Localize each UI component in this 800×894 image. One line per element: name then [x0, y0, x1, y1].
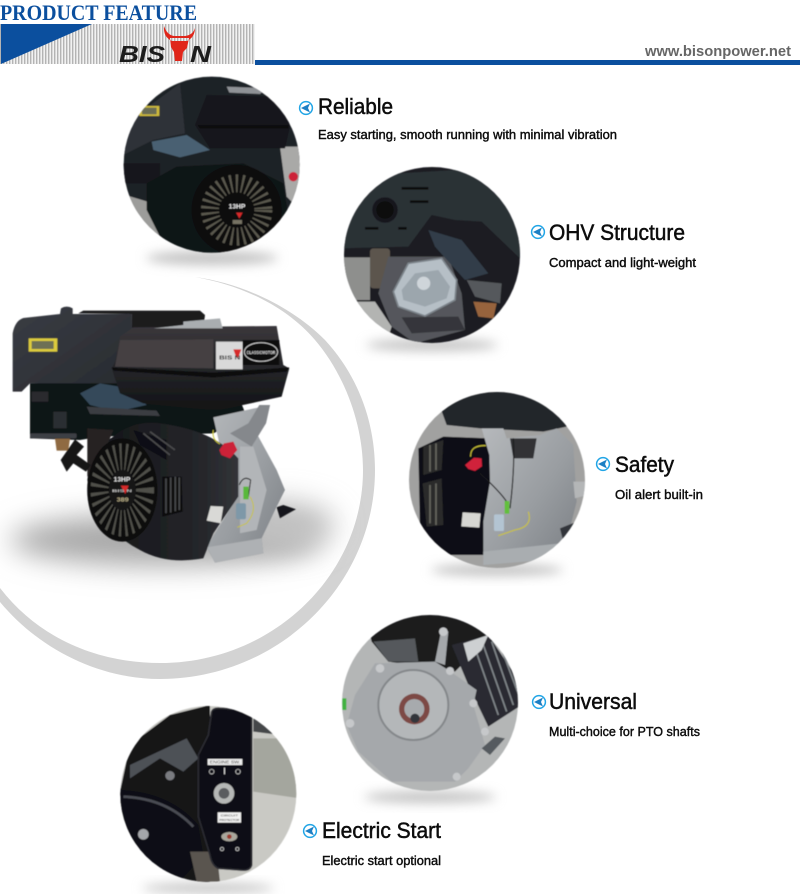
dark engine [120, 705, 210, 885]
air shroud [13, 307, 133, 392]
starter [192, 165, 282, 255]
heading: Safety [615, 452, 675, 477]
side vents [162, 477, 183, 517]
fan shroud side [418, 437, 490, 555]
photo: pto shaft [342, 612, 522, 795]
crankcase cover [347, 662, 485, 782]
main engine photo: BIS N [219, 356, 241, 362]
circle shadow [366, 339, 498, 351]
website url: www.bisonpower.net [644, 44, 791, 60]
icon: arrow bullet [533, 696, 545, 708]
pull handle [61, 439, 91, 472]
copper cup [55, 439, 70, 451]
title: product feature: PRODUCT FEATURE [0, 0, 197, 25]
icon: arrow bullet [304, 825, 316, 837]
circle shadow [431, 564, 563, 576]
fan shroud [147, 163, 290, 257]
photo: ignition panel: CIRCUIT [221, 814, 238, 818]
wires and sensor [213, 430, 253, 527]
crankcase aluminium [207, 405, 285, 563]
photo: ignition panel: ENGINE SW. [210, 760, 240, 765]
key switch [214, 783, 234, 804]
wires [190, 852, 220, 882]
block [378, 257, 465, 343]
feature 5: electric start [120, 705, 442, 893]
heading: OHV Structure [549, 220, 685, 245]
breaker [221, 832, 237, 841]
fan cover text: 13HP [114, 477, 131, 484]
logo: Bison: BIS [119, 41, 166, 67]
pto shaft [277, 505, 296, 518]
photo: engine front [120, 73, 303, 257]
icon: arrow bullet [597, 458, 609, 470]
base foot [207, 538, 263, 563]
cooling fins [452, 635, 522, 727]
photo: valve cover [342, 163, 525, 347]
warning label [29, 338, 57, 352]
carburettor detail [80, 383, 147, 412]
heading: Electric Start [322, 818, 442, 843]
fuel tank [112, 326, 289, 411]
crankcase [482, 428, 577, 563]
description: Electric start optional [322, 853, 441, 868]
blue triangle [1, 24, 92, 64]
fuel tank [195, 95, 290, 148]
main engine photo: 389 [117, 497, 129, 503]
description: Oil alert built-in [615, 487, 703, 502]
valve cover [393, 258, 457, 316]
logo: Bison [119, 26, 211, 67]
engine ground shadow [10, 501, 335, 566]
main engine photo: BIS N [112, 489, 133, 493]
green sensor [505, 501, 509, 514]
fuel cap [153, 318, 223, 328]
brand label [216, 342, 243, 369]
red cap [289, 172, 298, 181]
heading: Universal [549, 689, 637, 714]
feature 2: OHV structure [342, 163, 696, 351]
tank bottom [433, 388, 567, 432]
warning sticker [207, 506, 223, 523]
icon: arrow bullet [532, 226, 544, 238]
main engine photo: CLASSICMOTOR [247, 350, 276, 355]
housing [342, 170, 522, 260]
photo: ignition panel: PROTECTOR [219, 818, 240, 822]
wires [471, 446, 529, 536]
tip shaft [573, 482, 587, 498]
photo: engine front: 13HP [229, 205, 245, 211]
description: Compact and light-weight [549, 255, 696, 270]
logo: Bison: N [190, 41, 211, 67]
icon: red bull head [164, 26, 195, 61]
description: Easy starting, smooth running with minimal vibration [318, 127, 617, 142]
oil alert cap [219, 442, 237, 458]
circle shadow [142, 883, 274, 893]
red oil cap [465, 458, 482, 471]
fan shroud [87, 423, 238, 560]
feature 1: reliable [120, 73, 617, 265]
pipe [482, 737, 505, 755]
recoil starter vents [87, 438, 157, 542]
feature 4: universal [342, 612, 700, 803]
icon: arrow bullet [300, 102, 312, 114]
sticker [461, 512, 481, 528]
green wire [342, 698, 346, 710]
bolts [376, 664, 384, 673]
dark engine middle [30, 383, 247, 440]
carburettor [467, 280, 502, 303]
heading: Reliable [318, 94, 393, 119]
photo: ignition panel [120, 705, 300, 885]
grey crescent ring [0, 277, 375, 679]
dark back [365, 615, 492, 672]
blower curve [120, 790, 203, 882]
shroud [120, 83, 185, 157]
linkage [152, 135, 210, 157]
top housing [78, 311, 205, 328]
muffler pipe [370, 248, 390, 288]
striped banner [0, 24, 255, 64]
feature 3: safety [407, 388, 703, 576]
circle shadow [146, 251, 278, 265]
circle shadow [364, 791, 496, 803]
blue header bar [255, 60, 800, 65]
switch panel [198, 708, 252, 870]
base [402, 317, 465, 333]
main engine photo [13, 307, 296, 563]
photo: oil alert [407, 388, 590, 572]
label: engine sw [208, 759, 242, 765]
header [0, 0, 800, 67]
concrete wall [342, 257, 370, 300]
description: Multi-choice for PTO shafts [549, 724, 700, 739]
label: circuit protector [218, 812, 241, 823]
